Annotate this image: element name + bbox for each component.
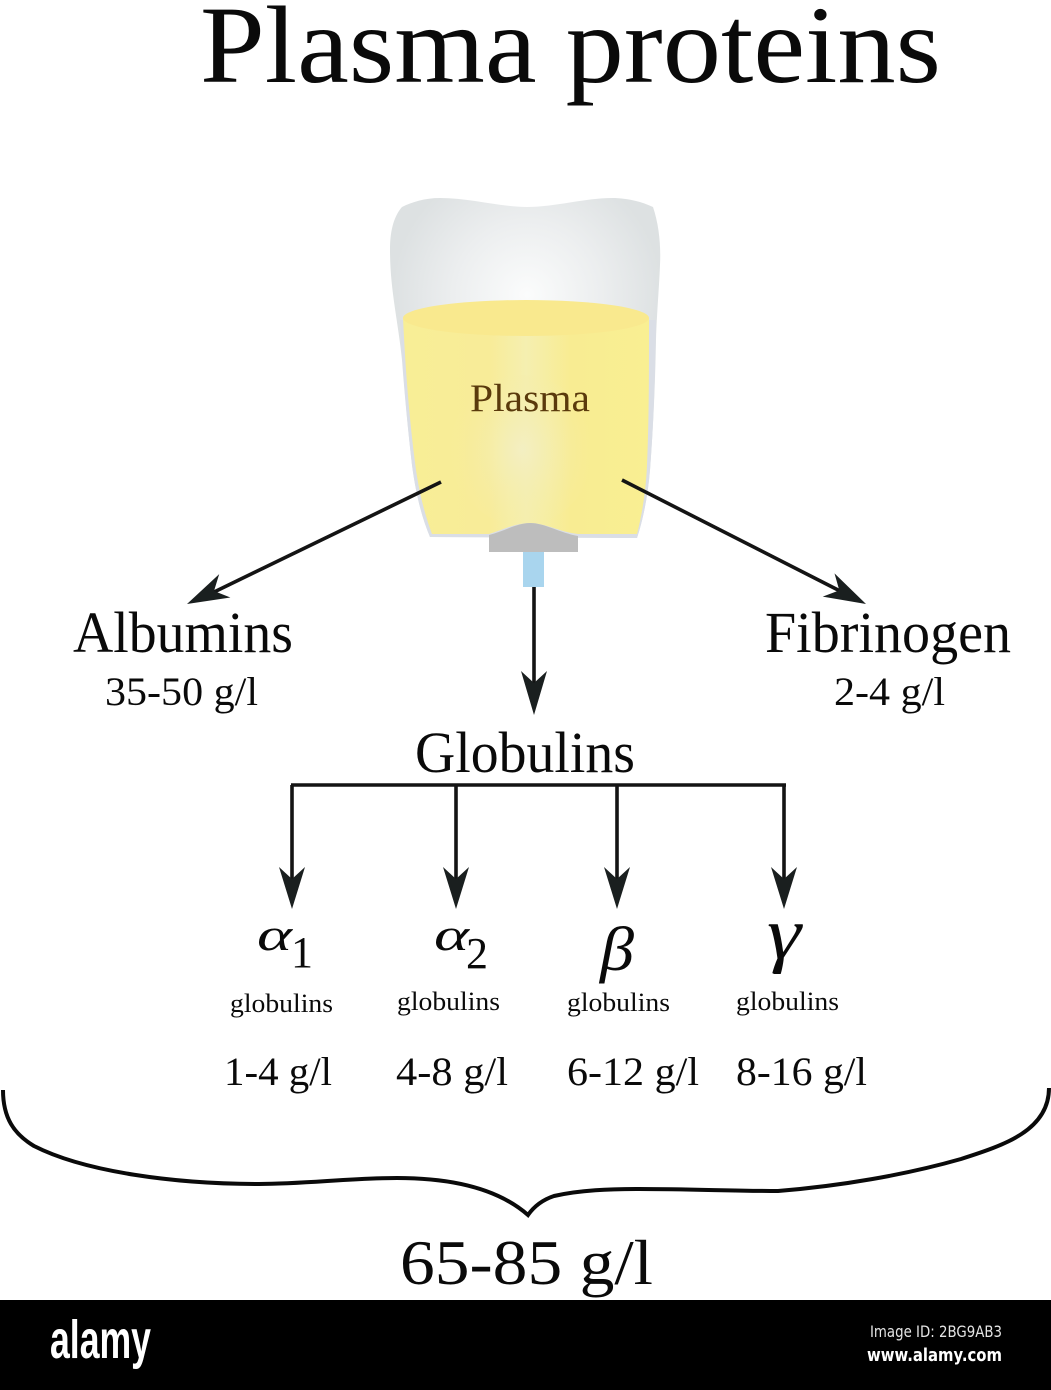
footer logo: alamy (50, 1310, 151, 1370)
footer url: www.alamy.com (867, 1345, 1002, 1366)
bag nozzle (489, 523, 578, 552)
heading: Albumins: Albumins (73, 600, 293, 665)
label: Plasma: Plasma (470, 377, 590, 420)
column: alpha 1 globulins: 1 (291, 928, 313, 977)
column: gamma globulins (736, 893, 867, 1094)
column: beta globulins (567, 916, 699, 1094)
column: alpha 2 globulins: 2 (466, 929, 488, 978)
bag tube (523, 552, 544, 587)
column: alpha 1 globulins: α (257, 909, 293, 960)
column: alpha 2 globulins (396, 909, 508, 1094)
total value: 65-85 g/l (400, 1227, 653, 1298)
icon: plasma bag (390, 198, 660, 587)
arrow: to globulins (521, 587, 547, 715)
column: gamma globulins: γ (767, 893, 803, 975)
value: Fibrinogen: 2-4 g/l (834, 669, 945, 714)
arrow: to albumins (187, 482, 441, 604)
column: gamma globulins: 8-16 g/l (736, 1049, 867, 1094)
column: beta globulins: β (599, 916, 634, 984)
globulins branching arrows (279, 785, 797, 909)
heading: Globulins: Globulins (415, 720, 635, 785)
column: alpha 2 globulins: α (434, 909, 470, 960)
column: alpha 1 globulins: globulins (230, 989, 333, 1018)
column: gamma globulins: globulins (736, 987, 839, 1016)
column: beta globulins: 6-12 g/l (567, 1049, 699, 1094)
column: alpha 2 globulins: globulins (397, 987, 500, 1016)
plasma liquid (403, 318, 649, 534)
bag body (390, 198, 660, 538)
footer image id: Image ID: 2BG9AB3 (870, 1322, 1002, 1341)
bag lower outline (400, 320, 656, 538)
column: alpha 2 globulins: 4-8 g/l (396, 1049, 508, 1094)
value: Albumins: 35-50 g/l (105, 669, 258, 714)
liquid highlight (450, 375, 594, 525)
liquid surface (403, 300, 649, 336)
column: alpha 1 globulins: 1-4 g/l (224, 1049, 332, 1094)
column: alpha 1 globulins (224, 909, 333, 1094)
heading: Fibrinogen: Fibrinogen (765, 600, 1011, 665)
watermark footer bar (0, 1300, 1051, 1390)
arrow: to fibrinogen (622, 480, 866, 604)
total brace (3, 1088, 1049, 1215)
column: beta globulins: globulins (567, 988, 670, 1017)
